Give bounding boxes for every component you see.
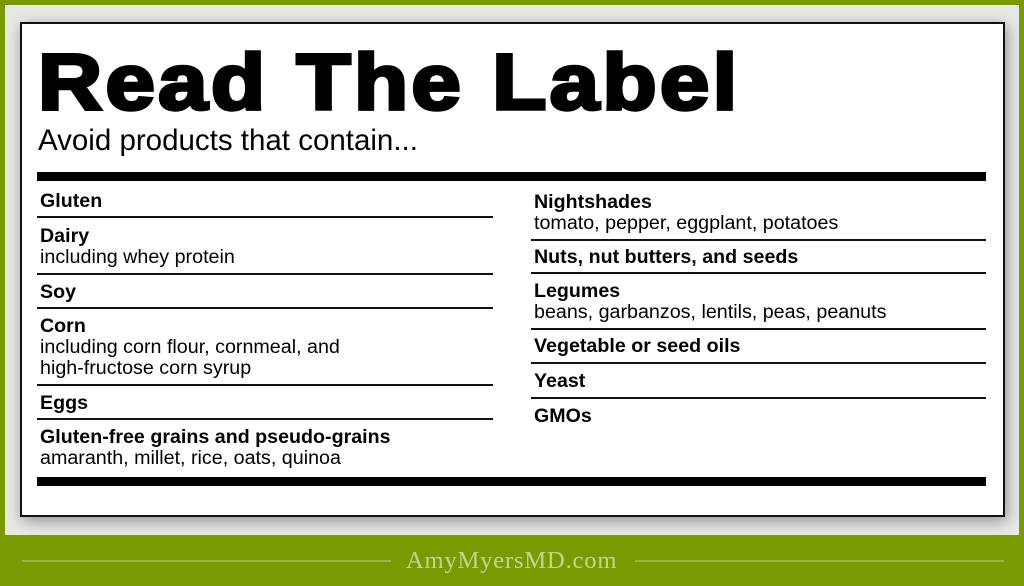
- item: oils: Vegetable or seed oils: [534, 335, 740, 357]
- footer line left: [22, 560, 391, 562]
- item: nuts: Nuts, nut butters, and seeds: [534, 246, 798, 268]
- subtitle: Avoid products that contain...: [38, 124, 418, 157]
- item: nightshades: tomato, pepper, eggplant, potatoes: [534, 212, 838, 234]
- item: legumes: Legumes: [534, 280, 620, 302]
- item: corn: Corn: [40, 315, 86, 337]
- item: gluten-free grains: amaranth, millet, rice, oats, quinoa: [40, 447, 341, 469]
- item: nightshades: Nightshades: [534, 191, 652, 213]
- footer line right: [635, 560, 1004, 562]
- item: eggs: Eggs: [40, 392, 88, 414]
- item: gluten: Gluten: [40, 190, 102, 212]
- item: corn: [40, 315, 340, 379]
- title: Read The Label: [38, 37, 741, 126]
- left column list: [37, 190, 493, 469]
- item: corn: high-fructose corn syrup: [40, 357, 251, 379]
- item: dairy: [40, 225, 235, 268]
- item: dairy: Dairy: [40, 225, 89, 247]
- item: dairy: including whey protein: [40, 246, 235, 268]
- footer website text: AmyMyersMD.com: [406, 547, 617, 574]
- item: corn: including corn flour, cornmeal, and: [40, 336, 340, 358]
- top thick rule: [37, 172, 986, 181]
- item: gmos: GMOs: [534, 405, 592, 427]
- item: gluten-free grains: Gluten-free grains and pseudo-grains: [40, 426, 391, 448]
- item: yeast: Yeast: [534, 370, 585, 392]
- bottom thick rule: [37, 477, 986, 486]
- right column list: [531, 191, 986, 427]
- item: gluten-free grains: [40, 426, 391, 469]
- item: legumes: beans, garbanzos, lentils, peas, peanuts: [534, 301, 886, 323]
- item: nightshades: [534, 191, 838, 234]
- item: soy: Soy: [40, 281, 76, 303]
- item: legumes: [534, 280, 886, 323]
